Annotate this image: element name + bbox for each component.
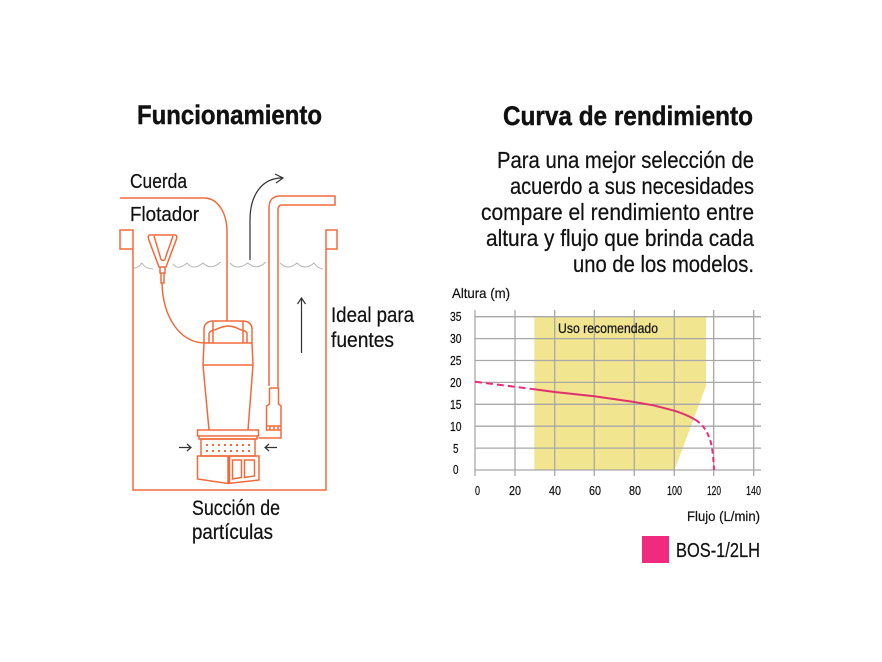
y axis labels: 0 xyxy=(453,462,458,477)
x axis labels: 40 xyxy=(549,483,561,498)
y axis labels: 20 xyxy=(450,375,462,390)
tank xyxy=(120,230,337,490)
legend xyxy=(642,536,760,563)
y axis title: Altura (m) xyxy=(452,285,510,301)
x axis labels: 60 xyxy=(589,483,601,498)
float switch xyxy=(148,235,177,283)
water surface xyxy=(134,262,323,269)
text block: description: Para una mejor selección de xyxy=(497,147,754,173)
area label: Uso recomendado xyxy=(558,320,658,336)
curve dashed high flow xyxy=(696,420,714,470)
flow up arrow xyxy=(298,298,306,353)
label: ideal para fuentes: Ideal para xyxy=(331,304,414,327)
discharge arrow xyxy=(250,174,283,260)
y axis labels: 35 xyxy=(450,309,462,324)
x axis labels: 140 xyxy=(746,483,761,498)
x axis labels: 100 xyxy=(667,483,682,498)
pump xyxy=(198,321,281,484)
grid xyxy=(475,310,761,476)
heading: Curva de rendimiento: Curva de rendimiento xyxy=(503,101,753,131)
y axis labels: 25 xyxy=(450,353,462,368)
label: ideal para fuentes: fuentes xyxy=(331,329,394,352)
pipe xyxy=(269,196,335,388)
label: succión de partículas: Succión de xyxy=(192,497,280,520)
x axis labels xyxy=(475,483,761,498)
heading: Funcionamiento: Funcionamiento xyxy=(137,100,322,130)
suction arrows xyxy=(179,444,277,451)
y axis labels: 15 xyxy=(450,397,462,412)
text block: description xyxy=(481,147,754,277)
x axis labels: 80 xyxy=(629,483,641,498)
float label: Flotador xyxy=(130,203,199,226)
text block: description: compare el rendimiento entre xyxy=(481,199,754,225)
y axis labels: 30 xyxy=(450,331,462,346)
legend label: BOS-1/2LH xyxy=(676,540,760,562)
legend swatch xyxy=(642,536,669,563)
chart: performance curve xyxy=(450,285,761,524)
text block: description: acuerdo a sus necesidades xyxy=(510,173,754,199)
y axis labels: 5 xyxy=(453,441,458,456)
label: succión de partículas: partículas xyxy=(192,521,273,544)
panel: pump diagram xyxy=(120,170,414,544)
text block: description: uno de los modelos. xyxy=(573,251,754,277)
x axis labels: 20 xyxy=(509,483,521,498)
y axis labels xyxy=(450,309,462,477)
label: succión de partículas xyxy=(192,497,280,544)
curve solid xyxy=(534,389,696,420)
float cable xyxy=(162,283,204,343)
x axis labels: 120 xyxy=(707,483,721,498)
curve dashed low flow xyxy=(475,382,534,389)
x axis labels: 0 xyxy=(475,483,480,498)
label: ideal para fuentes xyxy=(331,304,414,352)
recommended use area xyxy=(534,317,706,470)
text block: description: altura y flujo que brinda cada xyxy=(486,225,754,251)
x axis title: Flujo (L/min) xyxy=(687,508,760,524)
rope xyxy=(120,198,227,321)
rope label: Cuerda xyxy=(130,170,187,193)
y axis labels: 10 xyxy=(450,419,462,434)
